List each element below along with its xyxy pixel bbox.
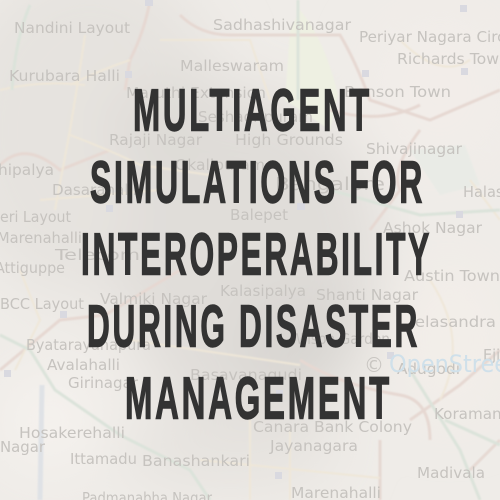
map place labels: Valmiki Nagar	[100, 290, 208, 308]
map place labels: Adugodi	[397, 360, 460, 378]
map place labels: Avalahalli	[47, 356, 120, 374]
map place labels: Dasarahalli	[52, 181, 137, 199]
map place labels: Nandini Layout	[14, 19, 130, 37]
map place labels: eri Layout	[0, 208, 71, 226]
map place labels: Benson Town	[344, 83, 451, 101]
map place labels: Girinagar	[68, 374, 139, 392]
map place labels: BCC Layout	[0, 295, 84, 313]
map place labels: Shivajinagar	[366, 140, 463, 158]
map place labels: Byatarayanapura	[26, 336, 151, 354]
map place labels: Kurubara Halli	[9, 67, 120, 85]
map place labels: Kalasipalya	[220, 282, 306, 300]
map place labels: Telecom	[54, 246, 140, 264]
map attribution watermark: ©	[364, 353, 384, 377]
map place labels: Malleswaram	[180, 57, 284, 75]
map place labels: Nagar	[0, 438, 46, 456]
map place labels: Wilson Garden	[290, 330, 390, 348]
map place labels: Balepet	[230, 206, 288, 224]
map place labels: Basavanagudi	[190, 366, 302, 384]
map place labels: Jayanagara	[269, 437, 358, 455]
map place labels: Maruthi Extension	[126, 84, 266, 102]
map place labels: Bangalore	[275, 174, 385, 195]
map place labels: High Grounds	[235, 131, 343, 149]
map place labels: Jelasandra	[409, 313, 496, 331]
map place labels: Canara Bank Colony	[253, 418, 412, 436]
title	[81, 78, 432, 432]
map place labels: Rajaji Nagar	[109, 131, 203, 149]
map place labels: Sadhashivanagar	[213, 16, 352, 34]
map place labels: Banashankari	[142, 452, 250, 470]
map place labels: Austin Town	[404, 267, 500, 285]
map place labels: Hosakerehalli	[19, 424, 125, 442]
map place labels: Seshadripuram	[198, 108, 313, 126]
map place labels: Ashok Nagar	[383, 219, 483, 237]
map place labels: Okalipuram	[175, 156, 265, 174]
map place labels: Shanti Nagar	[316, 286, 419, 304]
map place labels: Madivala	[417, 464, 485, 482]
map place labels: Ittamadu	[70, 450, 137, 468]
